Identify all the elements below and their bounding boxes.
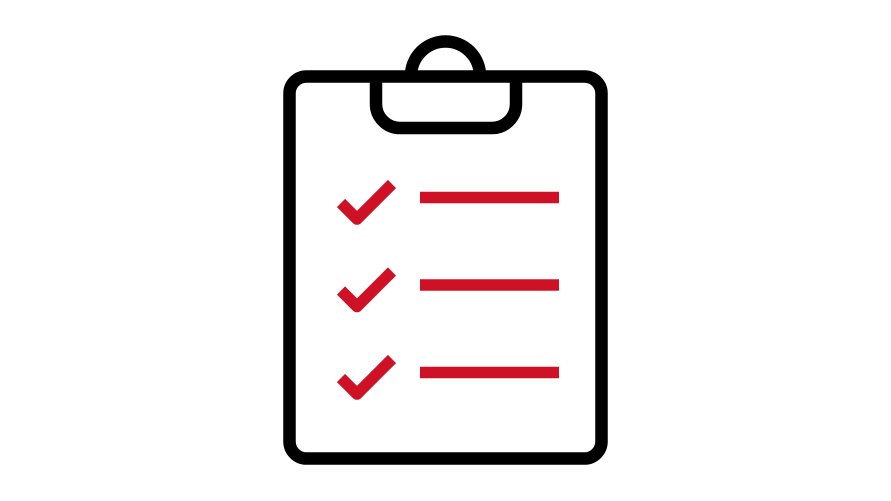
item 3: [341, 359, 559, 394]
clipboard board: [290, 76, 602, 458]
clipboard clip: [376, 42, 516, 128]
checklist items: [341, 184, 559, 394]
item 1: [341, 184, 559, 219]
item 2: [341, 272, 559, 306]
